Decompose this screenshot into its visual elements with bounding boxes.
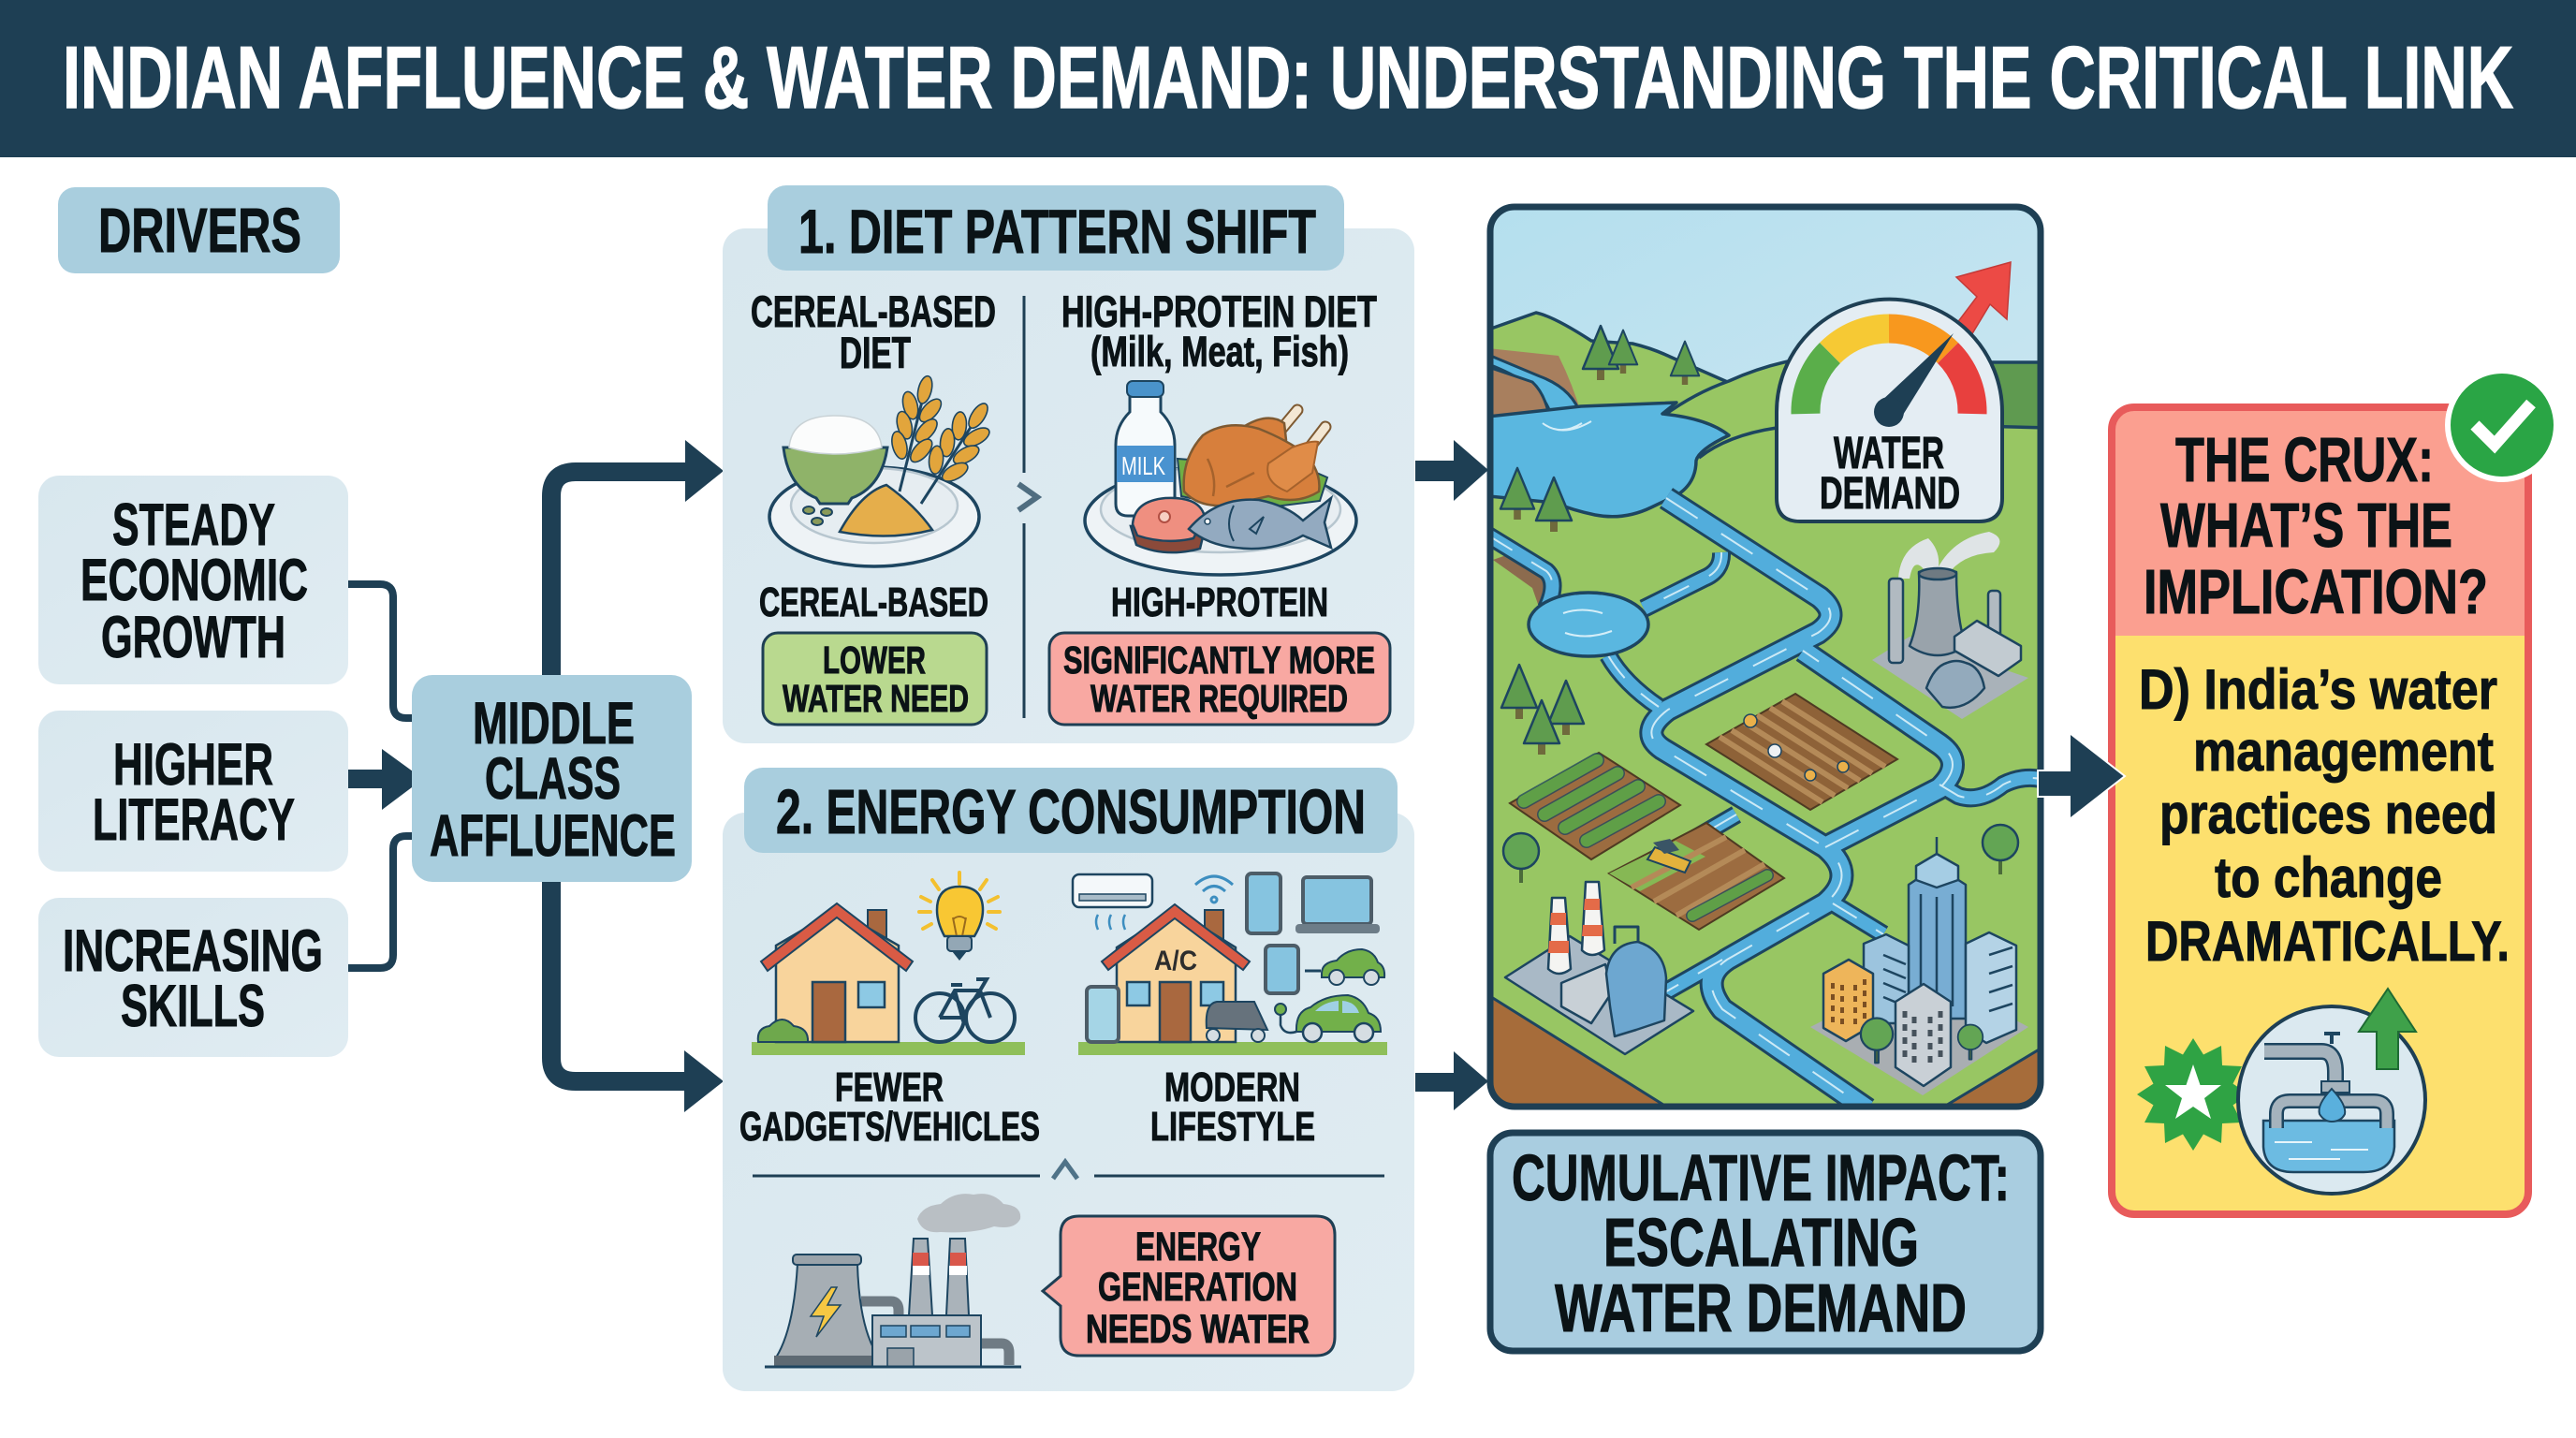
- label: cereal-based: CEREAL-BASED: [759, 580, 988, 625]
- driver: higher literacy: HIGHER: [113, 732, 273, 798]
- driver: steady economic growth: GROWTH: [101, 605, 285, 670]
- answer text: to change: [2215, 846, 2442, 909]
- icon: milk bottle: MILK: [1121, 451, 1165, 480]
- panel: energy consumption: [723, 768, 1414, 1391]
- box: cumulative impact: ESCALATING: [1603, 1206, 1919, 1281]
- icon: modest house: [752, 903, 1025, 1055]
- cliff and waterfall: [1494, 348, 1578, 415]
- arrow: energy to scene: [1415, 1051, 1488, 1110]
- icon: water tap and basin: [2238, 1006, 2425, 1194]
- icon: light bulb: [919, 873, 1000, 961]
- sky: [1494, 210, 2037, 380]
- label: modern lifestyle: LIFESTYLE: [1150, 1104, 1315, 1150]
- driver: increasing skills: INCREASING: [63, 918, 323, 984]
- icon: scooter: [1207, 1002, 1267, 1042]
- label: high-protein diet: HIGH-PROTEIN DIET: [1061, 286, 1377, 336]
- icon: modern house with devices: A/C: [1154, 946, 1197, 976]
- panel: diet pattern shift: [723, 185, 1414, 743]
- box: middle class affluence: CLASS: [485, 746, 621, 812]
- heading: energy consumption: [744, 768, 1398, 853]
- label: high-protein diet: (Milk, Meat, Fish): [1090, 328, 1349, 375]
- connector: skills to affluence: [348, 836, 414, 968]
- land: [1488, 313, 2050, 1114]
- gauge: water demand: DEMAND: [1820, 469, 1960, 519]
- label: modern lifestyle: [1150, 1064, 1315, 1150]
- heading: the crux: [2144, 425, 2488, 627]
- bottom soil corners: [1488, 995, 2045, 1109]
- badge: significantly more water required: [1049, 633, 1390, 725]
- title banner: [0, 0, 2576, 157]
- label: fewer gadgets/vehicles: [739, 1064, 1040, 1150]
- scene frame: [1490, 207, 2041, 1107]
- heading: drivers: [58, 187, 340, 273]
- arrow: diet to scene: [1415, 440, 1488, 501]
- callout: energy generation needs water: [1043, 1216, 1335, 1356]
- label: fewer gadgets/vehicles: GADGETS/VEHICLES: [739, 1104, 1040, 1150]
- factory: lower left: [1505, 882, 1693, 1054]
- riverbank: [1494, 556, 1543, 605]
- icon: small electric car: [1305, 949, 1384, 985]
- badge: lower water need: WATER NEED: [783, 677, 969, 720]
- gauge: water demand: [1777, 300, 2002, 521]
- icon: smartphone: [1266, 946, 1298, 993]
- answer text: management: [2193, 720, 2494, 783]
- heading: the crux: THE CRUX:: [2175, 425, 2434, 495]
- box: cumulative impact: CUMULATIVE IMPACT:: [1512, 1141, 2010, 1214]
- city skyline: [1810, 837, 2028, 1095]
- callout: energy generation needs water: NEEDS WATER: [1086, 1307, 1310, 1352]
- lake: [1488, 403, 1729, 517]
- box: cumulative impact: [1490, 1133, 2041, 1351]
- box: middle class affluence: MIDDLE: [473, 691, 635, 756]
- arrow: literacy to affluence: [348, 749, 423, 810]
- arrow: scene to crux: [2038, 733, 2125, 819]
- trees: [1500, 326, 2018, 883]
- divider with chevron: [1018, 296, 1037, 718]
- label: modern lifestyle: MODERN: [1164, 1064, 1300, 1110]
- answer text: practices need: [2159, 783, 2497, 845]
- label: high-protein diet: [1061, 286, 1377, 375]
- label: cereal-based diet: [751, 286, 996, 377]
- icon: protein plate: [1085, 381, 1356, 575]
- heading: drivers: DRIVERS: [98, 196, 301, 266]
- arrow heads: branch: [684, 440, 724, 1112]
- callout: energy generation needs water: ENERGY: [1135, 1225, 1261, 1269]
- label: fewer gadgets/vehicles: FEWER: [835, 1064, 944, 1110]
- box: middle class affluence: [412, 675, 692, 882]
- driver: increasing skills: SKILLS: [121, 974, 265, 1039]
- badge: significantly more water required: SIGNIFICANTLY MORE: [1063, 638, 1375, 682]
- gauge: water demand: WATER: [1834, 429, 1944, 478]
- icon: laptop: [1295, 877, 1380, 933]
- icon: air conditioner: [1073, 874, 1152, 930]
- driver: steady economic growth: [38, 476, 348, 684]
- callout: energy generation needs water: GENERATION: [1098, 1265, 1297, 1310]
- canals: [1488, 498, 2041, 1109]
- harvest field: [1609, 823, 1784, 930]
- heading: the crux: WHAT’S THE: [2160, 491, 2452, 561]
- badge: significantly more water required: WATER REQUIRED: [1090, 677, 1348, 720]
- driver: steady economic growth: STEADY: [112, 492, 275, 558]
- box: middle class affluence: AFFLUENCE: [430, 803, 676, 869]
- icon: large electric car: [1275, 995, 1381, 1042]
- crop field: [1510, 753, 1680, 859]
- icon: fish: [1189, 498, 1331, 549]
- driver: higher literacy: LITERACY: [93, 787, 295, 853]
- arrow: affluence to energy: [551, 880, 688, 1081]
- icon: power plant: [765, 1194, 1021, 1367]
- divider with caret: [753, 1162, 1384, 1179]
- icon: roast chicken: [1184, 410, 1325, 506]
- icon: green up arrow: [2359, 989, 2416, 1069]
- heading: energy consumption: 2. ENERGY CONSUMPTION: [776, 777, 1366, 847]
- heading: the crux: IMPLICATION?: [2144, 557, 2488, 627]
- connector: growth to affluence: [348, 584, 414, 718]
- icon: modern house with devices: [1073, 873, 1387, 1055]
- icon: steak: [1131, 498, 1205, 552]
- driver: higher literacy: [38, 711, 348, 872]
- arrow: affluence to diet: [551, 472, 688, 679]
- icon: green check badge: [2448, 371, 2556, 479]
- panel: the crux: [2112, 371, 2556, 1214]
- icon: milk bottle: [1116, 381, 1175, 516]
- label: cereal-based diet: DIET: [840, 328, 911, 377]
- label: cereal-based diet: CEREAL-BASED: [751, 286, 996, 336]
- badge: lower water need: LOWER: [823, 638, 926, 682]
- factory: upper right: [1872, 532, 2028, 719]
- icon: wifi: [1195, 876, 1233, 902]
- answer text: [2139, 658, 2510, 973]
- box: cumulative impact: WATER DEMAND: [1555, 1271, 1967, 1346]
- heading: diet pattern shift: 1. DIET PATTERN SHIFT: [798, 197, 1316, 266]
- pond: [1529, 593, 1648, 656]
- icon: tablet: [1087, 987, 1119, 1042]
- icon: phone: [1247, 873, 1281, 933]
- answer text: D) India’s water: [2139, 658, 2497, 721]
- heading: diet pattern shift: [768, 185, 1344, 271]
- icon: star badge: [2137, 1038, 2249, 1151]
- badge: lower water need: [763, 633, 987, 725]
- red rising arrow: [1939, 262, 2011, 354]
- ploughed field: [1706, 694, 1897, 810]
- icon: cereal plate: [769, 371, 1006, 566]
- driver: increasing skills: [38, 898, 348, 1057]
- driver: steady economic growth: ECONOMIC: [80, 548, 308, 613]
- label: high-protein: HIGH-PROTEIN: [1111, 580, 1328, 625]
- icon: bicycle: [915, 979, 1015, 1042]
- panel: water landscape scene: [1488, 204, 2050, 1114]
